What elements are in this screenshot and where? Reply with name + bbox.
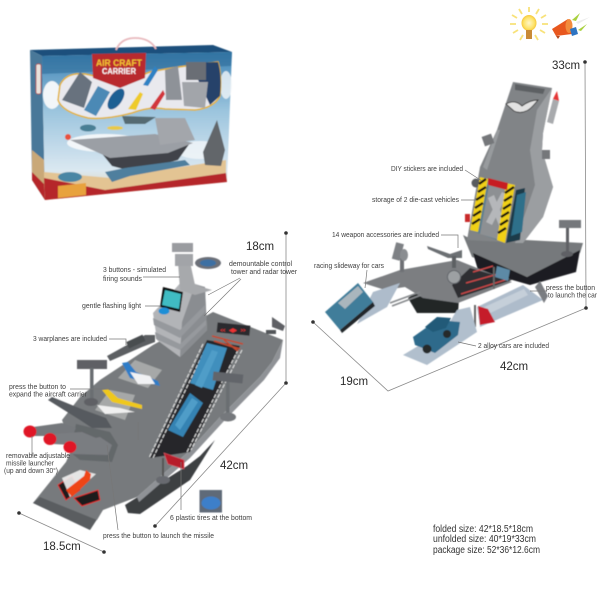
title banner: AIR CRAFT (96, 58, 142, 69)
blue tanks on track (168, 343, 227, 437)
annotation: expand button line 1: press the button to (9, 382, 66, 391)
flag post (156, 453, 184, 484)
runway track (149, 322, 250, 458)
car ramp (403, 307, 477, 365)
product window (58, 62, 221, 118)
annotation: storage: storage of 2 die-cast vehicles (372, 195, 459, 204)
dimension label 42cm right: 42cm (500, 361, 528, 373)
sand strip (44, 160, 226, 190)
carrier on box art (58, 116, 225, 182)
title banner: CARRIER (102, 67, 136, 76)
screen (158, 287, 183, 314)
spec: package size: package size: 52*36*12.6cm (433, 545, 540, 556)
dimension lines right toy (311, 60, 588, 391)
aircraft pads and planes (95, 360, 162, 420)
red bottom strip (44, 173, 227, 200)
dimension label 18.5cm: 18.5cm (43, 541, 81, 553)
handle (116, 38, 156, 50)
annotation: flashing light: gentle flashing light (82, 301, 142, 310)
title banner (92, 53, 146, 88)
spec: unfolded size: unfolded size: 40*19*33cm (433, 534, 536, 545)
twin gun (48, 397, 112, 428)
deck gun (107, 335, 155, 361)
box front face (42, 52, 232, 200)
missile launcher (24, 423, 118, 462)
upright tower (467, 82, 553, 243)
dimension lines left toy (17, 231, 288, 554)
radar dish right (266, 317, 285, 334)
unfolded deck (363, 260, 512, 303)
spec: folded size: folded size: 42*18.5*18cm (433, 524, 533, 535)
storage door (465, 177, 526, 243)
annotation: alloy cars: 2 alloy cars are included (478, 341, 549, 350)
megaphone icon (552, 13, 590, 39)
annotation: missile launcher line 1: removable adjustable (6, 451, 70, 460)
dimension label 33cm: 33cm (552, 60, 580, 72)
stern sticker (58, 470, 100, 506)
left ramp (357, 283, 421, 324)
runway track: « ◆ » (220, 328, 247, 334)
lower black hull (408, 285, 460, 313)
blue SUV (413, 317, 460, 354)
lamp post right (213, 371, 243, 422)
annotation: DIY stickers: DIY stickers are included (391, 164, 463, 173)
box top and side (30, 45, 232, 200)
annotation: weapon accessories: 14 weapon accessories are included (332, 230, 439, 239)
right carrier toy photo (325, 82, 583, 365)
tire photo inset (200, 490, 222, 512)
gun on deck (427, 246, 462, 268)
annotation: plastic tires: 6 plastic tires at the bottom (170, 513, 252, 522)
annotation: firing sounds: firing sounds (103, 274, 142, 283)
deck (33, 312, 283, 530)
hull shadow (125, 440, 215, 514)
annotation: launch car line 1: press the button (546, 283, 595, 292)
racing blue tank car (325, 283, 375, 333)
lightbulb icon (510, 7, 548, 40)
island tower (153, 243, 221, 357)
folded deck (463, 235, 583, 285)
left carrier toy photo (24, 243, 285, 530)
annotation: expand button line 2: expand the aircraft carrier (9, 390, 87, 398)
missile on tower (547, 91, 559, 124)
package box photo (30, 38, 232, 200)
annotation: control buttons: 3 buttons - simulated (103, 265, 166, 274)
flags and dishes (392, 242, 548, 303)
lamp post folded deck (559, 220, 581, 257)
annotation: radar tower: tower and radar tower (231, 267, 297, 276)
annotation: missile launcher line 3: (up and down 30°) (4, 466, 58, 475)
dimension label 42cm left: 42cm (220, 460, 248, 472)
dimension label 18cm: 18cm (246, 241, 274, 253)
annotation: launch missile: press the button to launch the missile (103, 531, 214, 540)
right ramp (474, 285, 543, 327)
annotation: racing slideway: racing slideway for cars (314, 261, 384, 270)
clouds (43, 71, 232, 159)
leader lines (32, 170, 547, 530)
dimension label 19cm: 19cm (340, 376, 368, 388)
lamp post left (77, 360, 107, 406)
annotation: control tower: demountable control (229, 259, 292, 268)
annotation: warplanes: 3 warplanes are included (33, 334, 107, 343)
annotation: missile launcher line 2: missile launcher (6, 458, 54, 468)
